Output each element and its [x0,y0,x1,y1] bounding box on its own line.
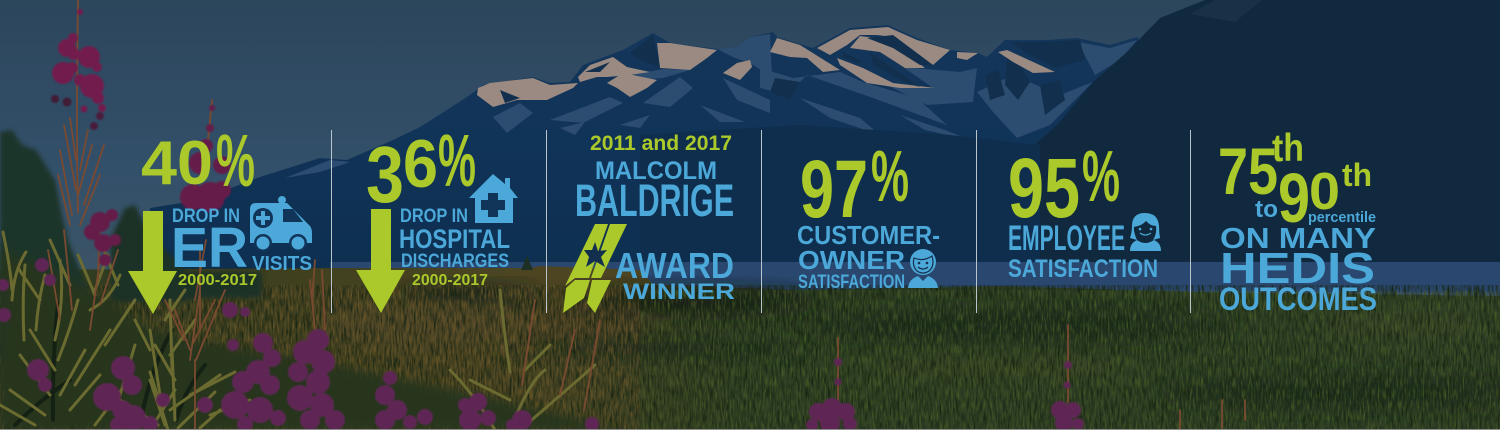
stat: 40% [141,119,255,202]
snow-lit peaks [477,27,1055,107]
stat: 90th: 0 [1309,163,1340,221]
arrow: down [356,209,405,313]
label: award: AWARD [615,245,734,286]
stat: 90th: th [1342,157,1372,193]
foliage base under the fireweed [0,250,620,430]
icon: ambulance [250,196,312,252]
column dividers [331,130,1191,313]
panel: 97% customer-owner satisfaction [797,137,940,293]
overlay bottom edge [0,429,1500,430]
panel: 36% drop in hospital discharges [356,119,518,313]
label: years: 2000-2017 [412,272,488,289]
panel: 40% drop in ER visits [128,119,312,314]
stat: 40%: 40 [141,129,213,198]
stat: 36% [366,119,476,219]
fireweed blossoms: tall stalk [51,9,106,130]
stat: 75th: 75 [1218,134,1278,208]
label: ER: ER [171,216,248,280]
label: hospital: HOSPITAL [399,224,510,254]
label: discharges: DISCHARGES [401,251,509,272]
stat: 36%: 3 [366,130,404,219]
panel: 75th to 90th percentile on many HEDIS outcomes [1218,127,1377,317]
label: Malcolm: MALCOLM [595,157,717,185]
stat: 36%: 6 [403,126,438,202]
label: winner: WINNER [623,279,735,304]
stat: 90th: 9 [1278,159,1310,237]
label: percentile: percentile [1308,209,1376,226]
shadows on the snow [500,35,1085,103]
lake [330,262,1500,292]
label: satisfaction: SATISFACTION [798,272,905,293]
arrow: down [128,211,177,314]
stat: 95%: 95 [1008,141,1080,235]
stat: 75th: th [1272,127,1304,170]
panel: 95% employee satisfaction [1008,137,1161,283]
label: years: 2011 and 2017 [590,132,732,155]
icon: award ribbon with star [563,224,627,313]
icon: smiling boy [908,249,938,288]
fireweed leaves [15,303,205,425]
label: HEDIS: HEDIS [1220,244,1375,293]
meadow [0,256,1500,430]
label: Baldrige: BALDRIGE [575,175,734,226]
stat: 40%: % [216,119,255,202]
label: employee: EMPLOYEE [1008,219,1125,258]
dark right mountain [1000,0,1500,275]
stat: 97%: 97 [800,144,868,235]
label: owner: OWNER [798,245,905,275]
stat: 97%: % [871,137,909,217]
label: drop in: DROP IN [172,206,240,227]
label: customer-: CUSTOMER- [797,220,940,250]
label: to: to [1255,196,1278,223]
dark rock streaks [770,58,1065,115]
stat: 90th [1278,157,1372,237]
slate rock and ice [285,34,1137,178]
label: drop in: DROP IN [400,206,468,227]
label: years: 2000-2017 [178,272,257,289]
label: visits: VISITS [252,253,312,275]
fireweed blossoms: second stalk [84,105,231,266]
label: on many: ON MANY [1220,223,1376,255]
fireweed blossoms: meadow clusters [0,258,1084,430]
label: outcomes: OUTCOMES [1219,281,1377,317]
label: satisfaction: SATISFACTION [1008,255,1158,283]
icon: house with cross [469,174,518,223]
icon: smiling woman [1130,213,1161,251]
stat: 36%: % [438,119,476,202]
stat: 95%: % [1082,137,1120,217]
conifer trees [0,130,262,360]
panel: Malcolm Baldrige award [563,132,735,313]
mountain range [150,0,1500,275]
